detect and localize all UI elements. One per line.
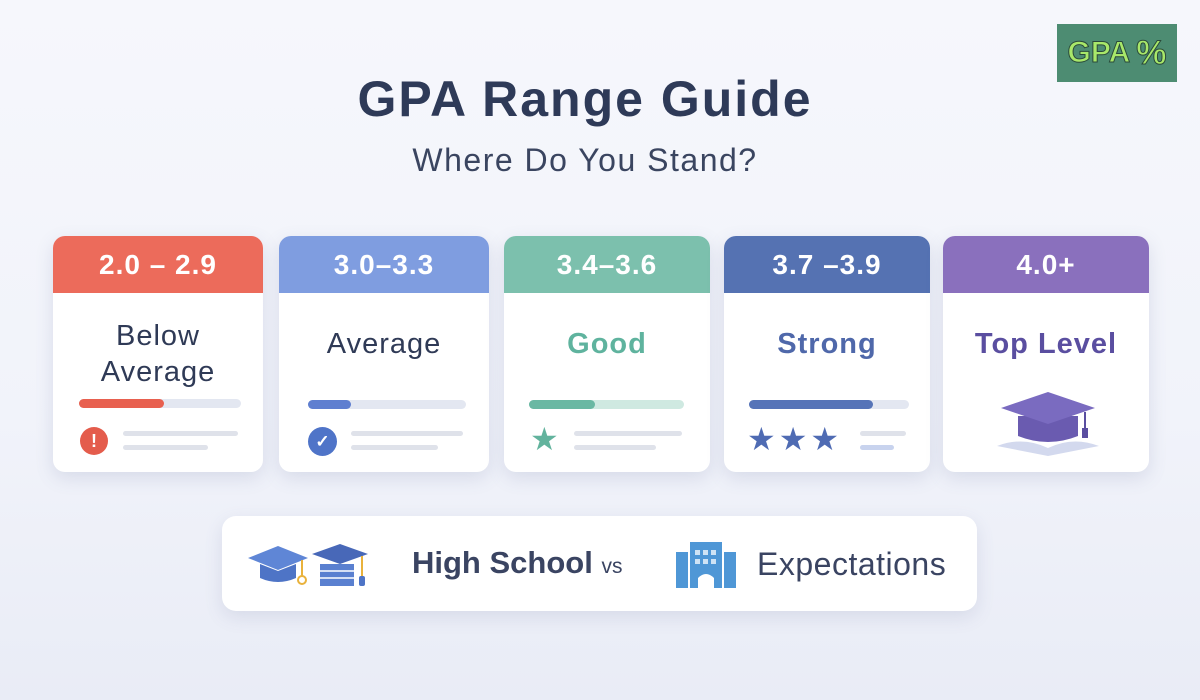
icon: caps [248,544,368,586]
card: 3.7-3.9 [724,236,930,472]
progress bar [749,400,909,409]
panel: high school vs expectations [222,516,977,611]
text: high school vs: High School vs [412,545,622,580]
logo: GPA [1067,36,1130,69]
icon: check [308,427,337,456]
label: below average [100,320,215,388]
label: top level: Top Level [975,328,1117,360]
card: 3.7-3.9: 3.7 –3.9 [772,249,882,280]
text: expectations: Expectations [757,546,946,582]
card: 2.0-2.9: 2.0 – 2.9 [99,249,217,280]
card: 3.4-3.6: 3.4–3.6 [557,249,657,280]
icon: check: ✓ [315,432,330,451]
card: 4.0+ [943,236,1149,472]
icon: building [676,542,736,588]
label: below average: Below [116,320,200,352]
icon: star: ★ [530,421,559,457]
card: 3.0-3.3: 3.0–3.3 [334,249,434,280]
logo [1057,24,1177,82]
progress bar [308,400,466,409]
label: strong: Strong [777,328,877,360]
card: 3.4-3.6 [504,236,710,472]
icon: three stars: ★★★ [747,421,842,457]
card: 4.0+: 4.0+ [1016,249,1076,280]
label: average: Average [327,328,441,360]
card: 2.0-2.9 [53,236,263,472]
icon: warning [80,427,108,455]
subtitle: Where Do You Stand? [412,142,758,178]
icon: warning: ! [91,431,97,451]
progress bar [79,399,241,408]
title: GPA Range Guide [357,71,813,127]
label: good: Good [567,328,647,360]
logo: % [1136,34,1167,72]
label: below average: Average [101,356,215,388]
card: 3.0-3.3 [279,236,489,472]
icon: graduation cap [998,392,1098,456]
progress bar [529,400,684,409]
